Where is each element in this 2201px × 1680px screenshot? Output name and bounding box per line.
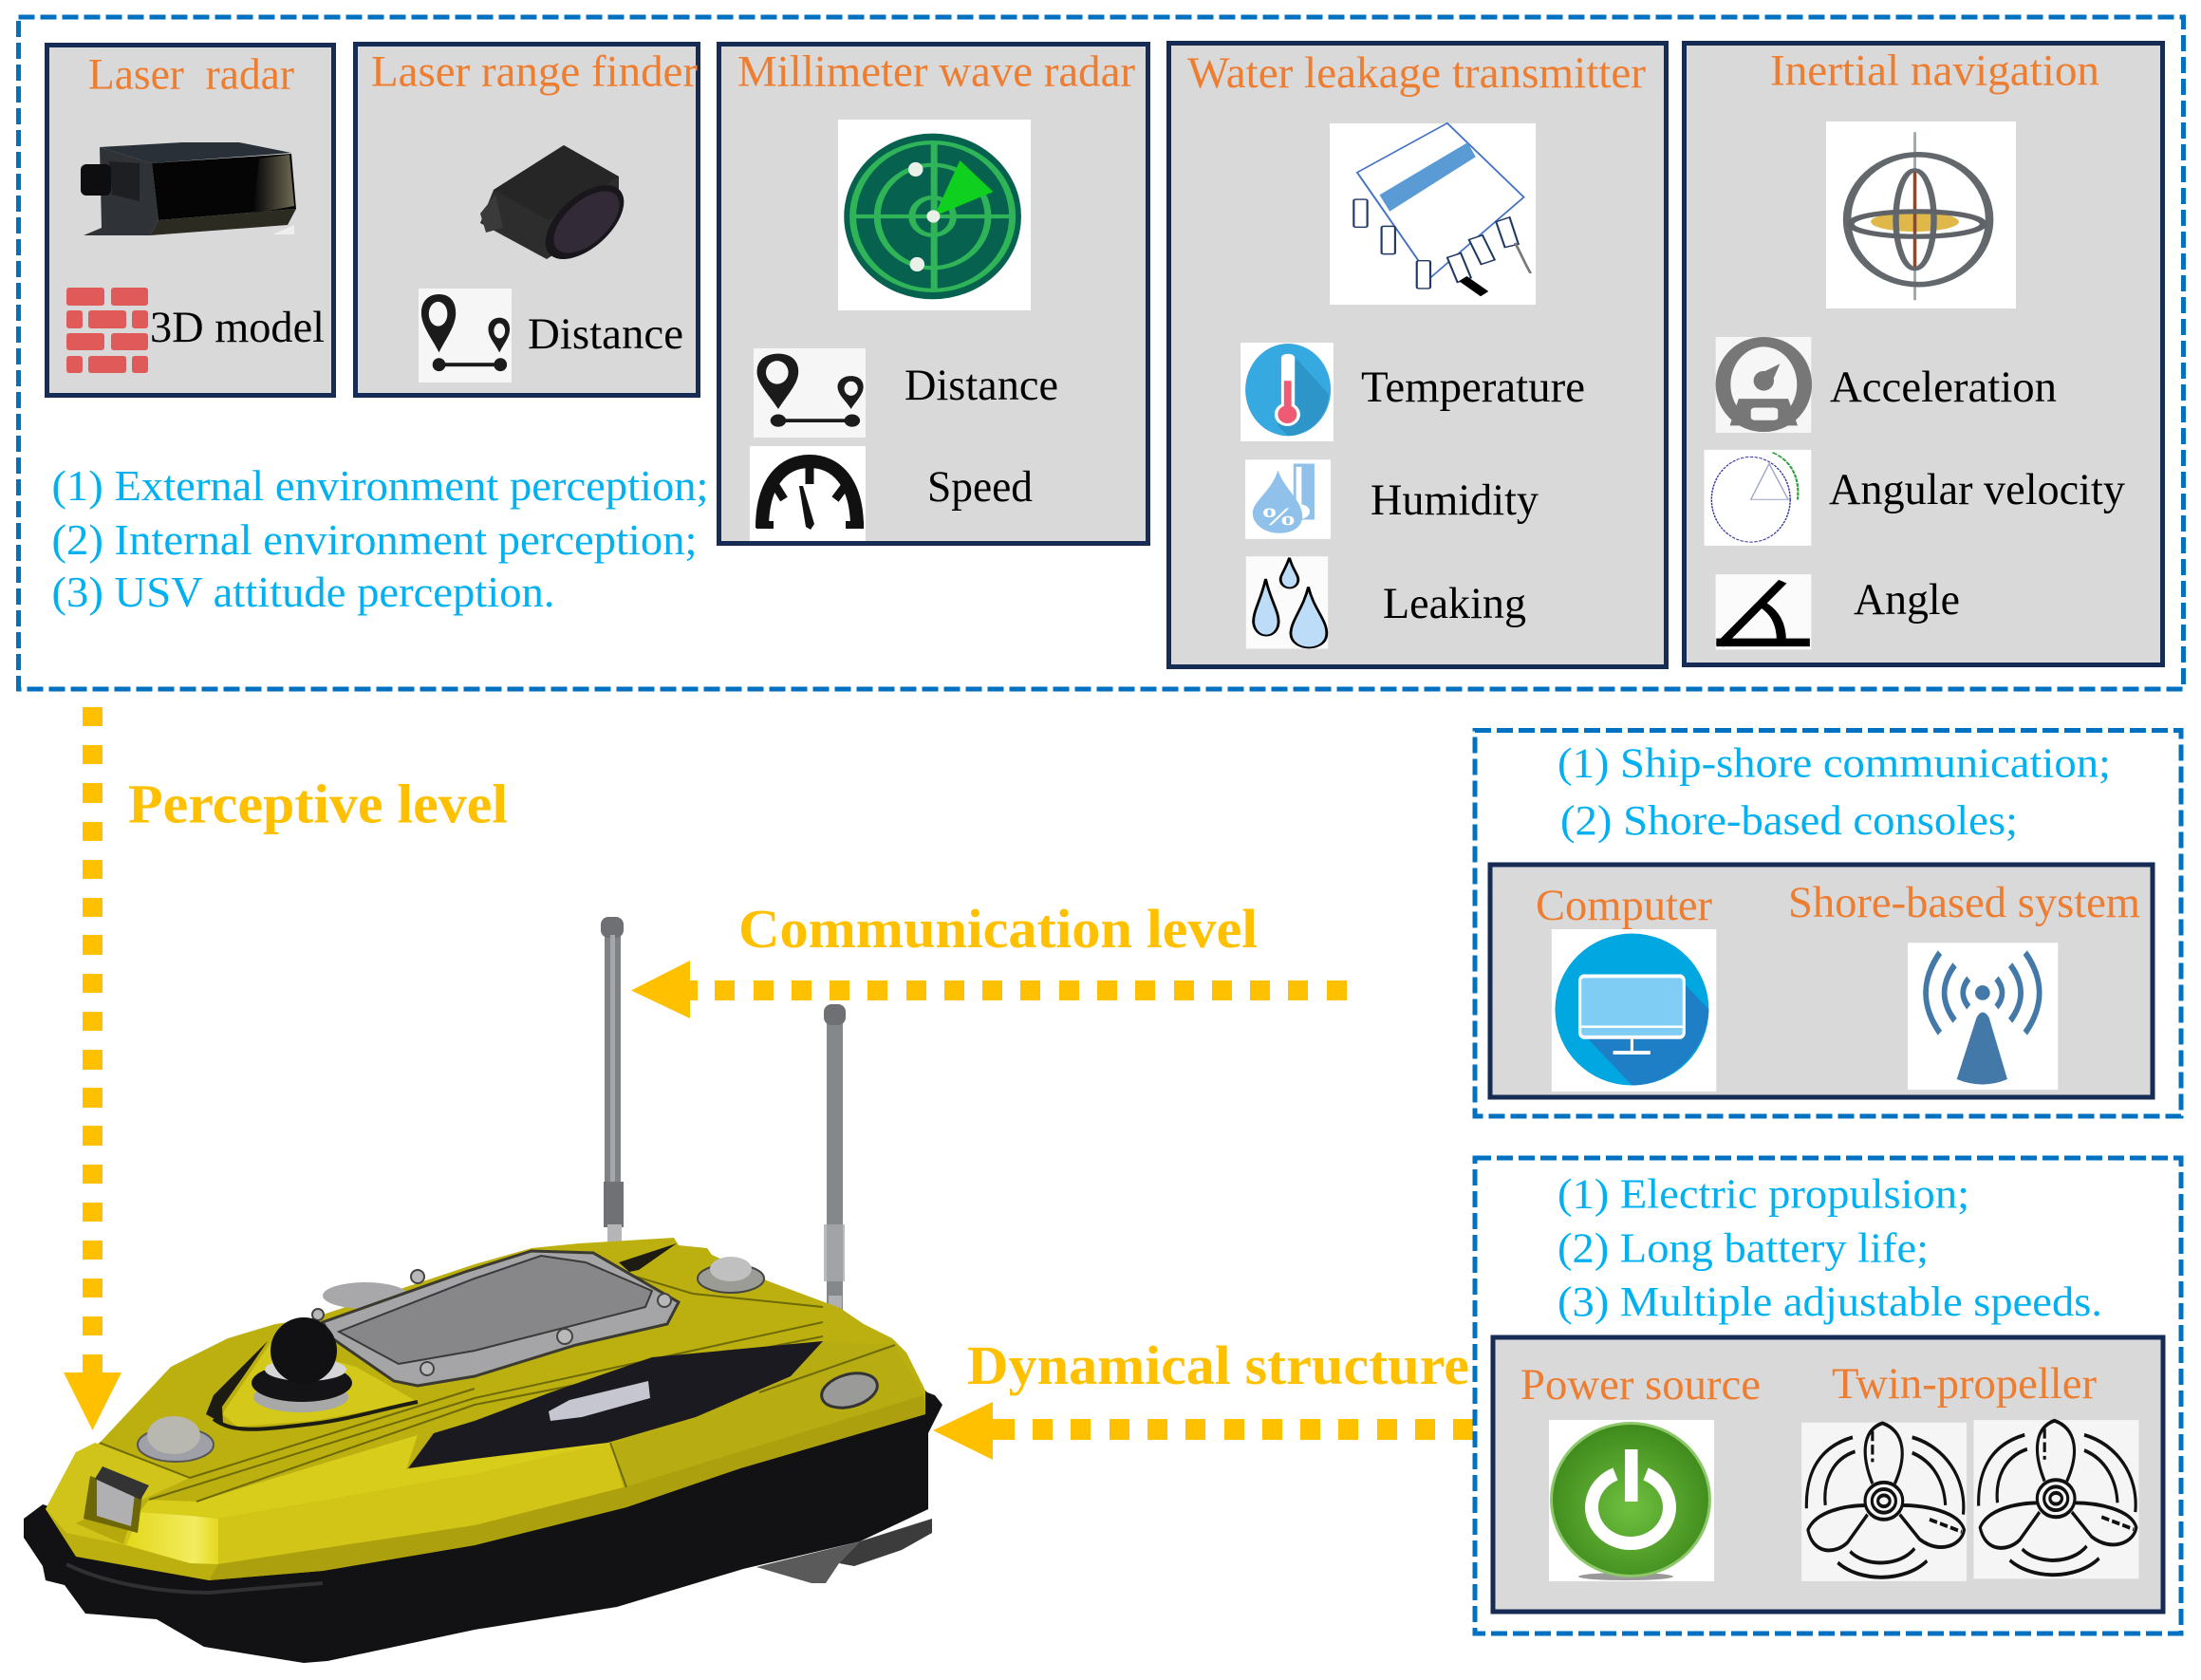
icon: laser radar device <box>81 142 296 235</box>
icon: humidity: % <box>1259 504 1297 531</box>
label: humidity: Humidity <box>1371 476 1539 525</box>
panel: power devices <box>1493 1337 2163 1612</box>
panel: millimeter wave radar <box>719 44 1148 543</box>
icon: humidity <box>1245 459 1331 539</box>
icon: thermometer <box>1240 343 1334 441</box>
illustration: unmanned surface vessel <box>24 917 942 1663</box>
text block: communication functions <box>1557 740 2111 844</box>
antenna: front <box>601 917 624 1243</box>
antenna: rear <box>824 1004 846 1334</box>
text block: perception functions: (1) External environment perception; <box>51 461 708 510</box>
heading: perceptive level: Perceptive level <box>128 773 508 835</box>
hull: black lower body <box>24 1391 942 1663</box>
panel: dynamical structure dashed frame <box>1475 1158 2181 1633</box>
heading: laser range finder: Laser range finder <box>371 47 698 97</box>
deck: hatch frame <box>323 1251 679 1386</box>
heading: inertial navigation: Inertial navigation <box>1770 47 2099 96</box>
deck: lines <box>100 1262 895 1502</box>
panel: laser radar <box>47 46 334 395</box>
deck: dome triangle <box>222 1343 418 1427</box>
icon: wireless antenna <box>1908 943 2058 1090</box>
label: acceleration: Acceleration <box>1830 363 2057 412</box>
label: temperature: Temperature <box>1361 363 1585 412</box>
text block: perception functions: (3) USV attitude perception. <box>51 568 554 616</box>
icon: angle <box>1716 574 1811 649</box>
icon: distance <box>754 348 866 438</box>
text block: communication functions: (2) Shore-based consoles; <box>1560 797 2018 844</box>
text block: propulsion functions: (1) Electric propulsion; <box>1557 1171 1969 1217</box>
icon: speedometer <box>750 446 866 541</box>
panel: inertial navigation <box>1684 44 2162 664</box>
label: angle: Angle <box>1854 575 1960 625</box>
icon: water leakage sensor <box>1330 123 1536 305</box>
heading: communication level: Communication level <box>738 898 1258 960</box>
text block: propulsion functions <box>1557 1171 2102 1325</box>
deck: black slot <box>619 1243 677 1272</box>
text block: propulsion functions: (2) Long battery life; <box>1557 1224 1929 1272</box>
deck: hatch bolts <box>312 1270 671 1375</box>
deck: front camera <box>76 1466 149 1544</box>
label: 3D model: 3D model <box>150 303 325 352</box>
panel: perceptive level dashed frame <box>19 17 2183 689</box>
hull: front deck <box>46 1443 190 1545</box>
icon: acceleration gauge <box>1716 337 1811 433</box>
heading: dynamical structure: Dynamical structure <box>967 1335 1469 1396</box>
hull: side panels <box>209 1341 925 1580</box>
label: speed: Speed <box>927 462 1033 512</box>
label: distance: Distance <box>528 309 683 359</box>
heading: power source: Power source <box>1520 1360 1761 1409</box>
label: angular velocity: Angular velocity <box>1829 465 2125 514</box>
heading: shore-based system: Shore-based system <box>1788 878 2140 927</box>
icon: propeller right <box>1973 1420 2138 1578</box>
label: distance: Distance <box>905 361 1058 410</box>
icon: radar screen <box>838 120 1031 310</box>
panel: water leakage transmitter <box>1169 44 1667 666</box>
hull: yellow deck <box>46 1238 925 1580</box>
icon: distance <box>419 289 512 383</box>
heading: millimeter wave radar: Millimeter wave radar <box>737 47 1135 97</box>
icon: power button <box>1549 1420 1714 1581</box>
deck: black stripe around dome <box>206 1341 418 1429</box>
text block: perception functions: (2) Internal environment perception; <box>51 515 697 564</box>
deck: black window <box>408 1341 823 1468</box>
deck: dome sensor <box>252 1317 352 1412</box>
arrow: communication level <box>631 961 1347 1018</box>
icon: computer <box>1552 929 1716 1092</box>
heading: computer: Computer <box>1536 881 1712 930</box>
text block: communication functions: (1) Ship-shore communication; <box>1557 740 2111 786</box>
arrow: perceptive level <box>64 707 121 1430</box>
deck: vent <box>818 1368 881 1413</box>
heading: water leakage transmitter: Water leakage transmitter <box>1187 48 1646 98</box>
deck: hatch lid <box>339 1256 652 1364</box>
hull: fin <box>756 1519 932 1583</box>
text block: perception functions <box>51 461 708 616</box>
hull: bumper strip <box>66 1564 323 1593</box>
panel: communication level dashed frame <box>1475 731 2181 1116</box>
deck: rear button <box>698 1257 764 1293</box>
text block: propulsion functions: (3) Multiple adjustable speeds. <box>1557 1279 2102 1325</box>
deck: front button <box>138 1416 214 1462</box>
deck: grey hump <box>323 1282 408 1309</box>
icon: angular velocity <box>1704 450 1811 546</box>
icon: propeller left <box>1801 1423 1967 1581</box>
heading: laser radar: Laser radar <box>88 49 294 99</box>
arrow: dynamical structure <box>933 1402 1473 1460</box>
icon: 3D model bricks <box>66 288 148 373</box>
deck: handle <box>549 1381 650 1421</box>
icon: gyroscope <box>1826 121 2016 308</box>
label: leaking: Leaking <box>1383 579 1526 628</box>
panel: laser range finder <box>355 44 699 395</box>
icon: water drops <box>1246 556 1328 648</box>
heading: twin-propeller: Twin-propeller <box>1832 1359 2097 1409</box>
hull: bright upper side <box>140 1435 610 1519</box>
panel: communication devices <box>1490 865 2153 1097</box>
hull: bright nose <box>126 1512 218 1564</box>
icon: range finder device <box>480 145 637 273</box>
